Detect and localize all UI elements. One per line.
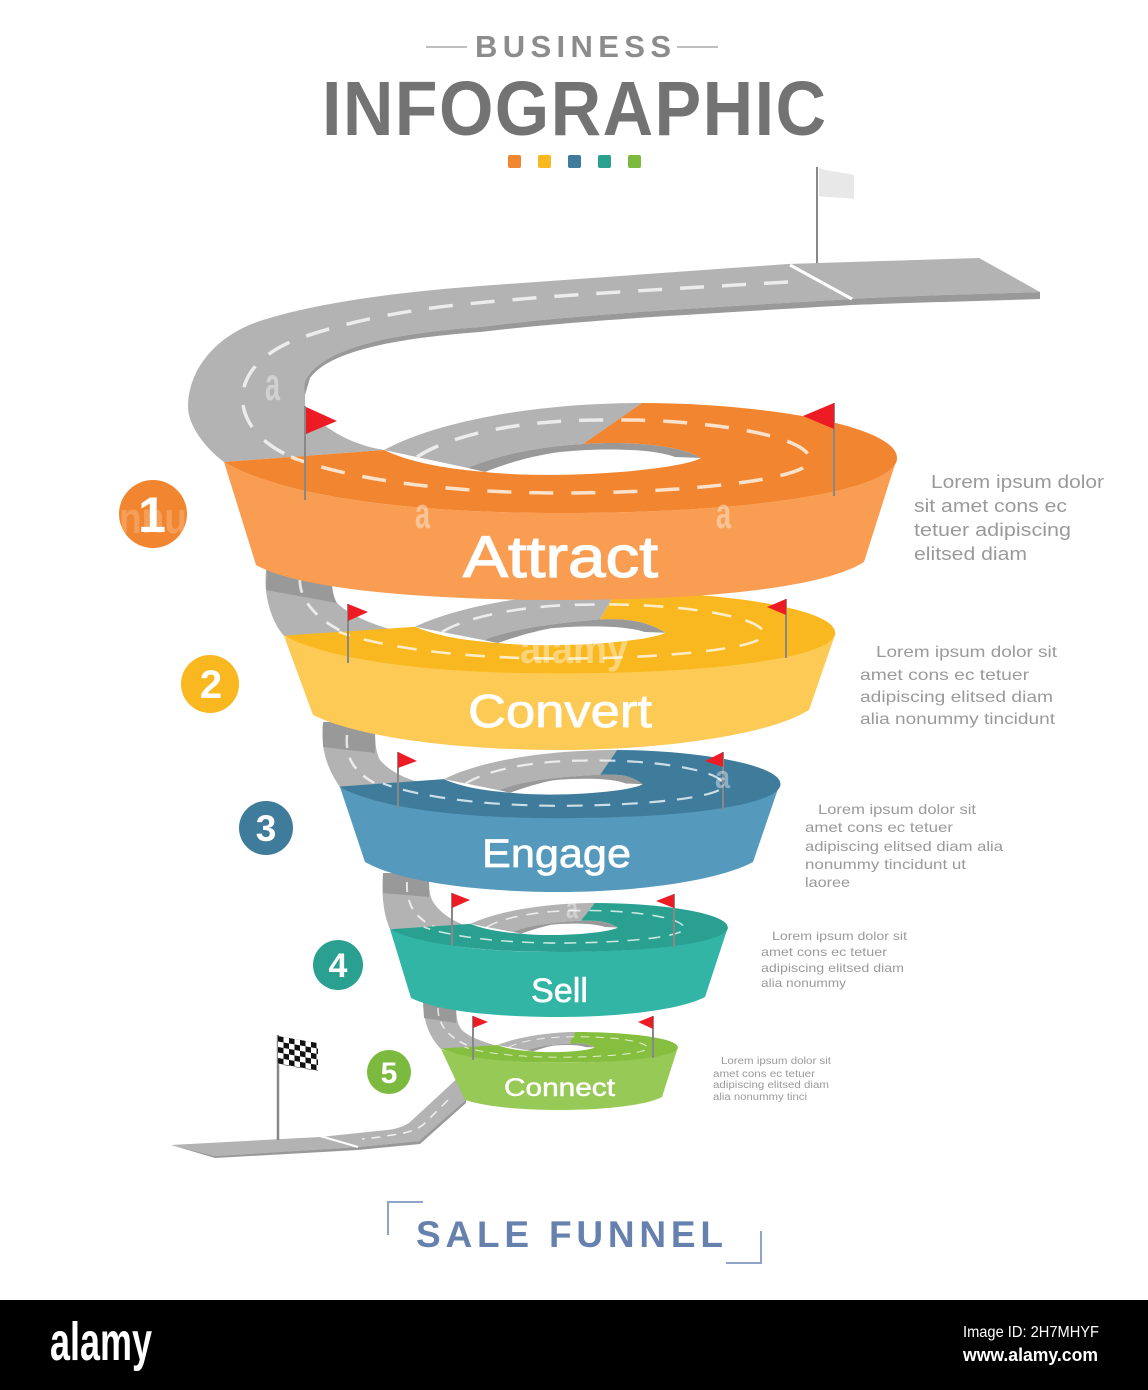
watermarks on orange: a bbox=[415, 489, 430, 538]
description 4: amet cons ec tetuer bbox=[761, 945, 887, 959]
top road bbox=[188, 258, 1040, 462]
funnel band 2 bbox=[284, 632, 836, 750]
description 5: amet cons ec tetuer bbox=[713, 1069, 816, 1080]
watermark on blue road: a bbox=[715, 759, 730, 795]
label: attract: Attract bbox=[463, 525, 658, 590]
flags 1 bbox=[305, 403, 834, 500]
start flag: white bbox=[817, 167, 854, 264]
description 5 bbox=[713, 1056, 831, 1103]
flags 5 bbox=[473, 1016, 653, 1060]
label: engage: Engage bbox=[482, 832, 631, 876]
footer heading: sale funnel: SALE FUNNEL bbox=[416, 1214, 723, 1255]
description 4: adipiscing elitsed diam bbox=[761, 961, 904, 975]
description 2: amet cons ec tetuer bbox=[860, 667, 1030, 684]
colour swatches bbox=[508, 155, 641, 168]
watermark footer bar: alamy bbox=[50, 1312, 152, 1372]
funnel band 4 bbox=[390, 927, 728, 1017]
description 3 bbox=[805, 801, 1003, 890]
funnel top and road 1 bbox=[224, 403, 897, 513]
watermark footer bar: www.alamy.com bbox=[962, 1345, 1098, 1365]
number badge 1: nnu bbox=[119, 494, 187, 543]
description 4 bbox=[761, 929, 908, 990]
number badge 4 bbox=[313, 940, 363, 990]
description 2: alia nonummy tincidunt bbox=[860, 711, 1056, 728]
watermark footer bar: Image ID: 2H7MHYF bbox=[963, 1324, 1099, 1341]
description 2: adipiscing elitsed diam bbox=[860, 689, 1053, 706]
description 4: Lorem ipsum dolor sit bbox=[772, 929, 908, 943]
funnel top and road 4 bbox=[390, 903, 728, 952]
title: infographic: INFOGRAPHIC bbox=[322, 65, 826, 152]
level 5: connect bbox=[423, 1000, 678, 1110]
connector road 2 bbox=[266, 565, 410, 642]
label: connect: Connect bbox=[504, 1074, 615, 1102]
number badge 1: 1 bbox=[138, 487, 166, 543]
number badge 3: 3 bbox=[256, 808, 276, 849]
number badge 3 bbox=[239, 801, 293, 855]
description 5: adipiscing elitsed diam bbox=[713, 1080, 829, 1091]
flags 3 bbox=[398, 752, 723, 810]
description 3: nonummy tincidunt ut bbox=[805, 856, 966, 872]
funnel top and road 2 bbox=[284, 592, 835, 673]
level 2: convert bbox=[266, 565, 836, 750]
flags 4 bbox=[452, 893, 674, 947]
watermark on teal road: a bbox=[566, 892, 578, 925]
number badge 5: 5 bbox=[381, 1057, 397, 1090]
description 5: Lorem ipsum dolor sit bbox=[721, 1056, 831, 1067]
label: convert: Convert bbox=[468, 685, 652, 737]
level 4: sell bbox=[382, 873, 728, 1017]
level 1: attract bbox=[188, 258, 1040, 600]
funnel band 1 bbox=[224, 458, 897, 600]
watermarks on orange bbox=[415, 489, 731, 538]
description 3: adipiscing elitsed diam alia bbox=[805, 838, 1003, 854]
level 3: engage bbox=[322, 722, 780, 892]
funnel band 5 bbox=[441, 1047, 678, 1110]
connector road 3 bbox=[322, 722, 447, 792]
road exit and checkered finish bbox=[171, 1035, 490, 1158]
description 1: Lorem ipsum dolor bbox=[931, 472, 1104, 492]
description 1: sit amet cons ec bbox=[914, 496, 1067, 516]
number badge 4: 4 bbox=[329, 947, 348, 985]
description 5: alia nonummy tinci bbox=[713, 1092, 807, 1103]
watermark footer bar bbox=[0, 1300, 1148, 1390]
watermark on yellow: alamy bbox=[520, 625, 629, 672]
description 3: laoree bbox=[805, 874, 850, 890]
description 3: Lorem ipsum dolor sit bbox=[818, 801, 976, 817]
heading: business: BUSINESS bbox=[475, 29, 671, 64]
funnel top and road 5 bbox=[441, 1032, 678, 1063]
funnel top and road 3 bbox=[339, 750, 780, 818]
description 1 bbox=[914, 472, 1104, 564]
number badge 1 bbox=[119, 480, 187, 548]
footer heading: sale funnel bbox=[388, 1202, 761, 1263]
description 2: Lorem ipsum dolor sit bbox=[876, 644, 1058, 661]
description 2 bbox=[860, 644, 1058, 728]
top road: a bbox=[265, 358, 280, 410]
description 4: alia nonummy bbox=[761, 976, 846, 990]
number badge 2: 2 bbox=[200, 663, 222, 707]
funnel band 3 bbox=[340, 783, 780, 892]
label: sell: Sell bbox=[531, 972, 588, 1010]
description 1: elitsed diam bbox=[914, 544, 1027, 564]
description 3: amet cons ec tetuer bbox=[805, 819, 953, 835]
description 1: tetuer adipiscing bbox=[914, 520, 1071, 540]
number badge 2 bbox=[181, 655, 239, 713]
connector road 5 bbox=[423, 1000, 500, 1050]
connector road 4 bbox=[382, 873, 476, 933]
watermarks on orange: a bbox=[716, 489, 731, 538]
number badge 5 bbox=[367, 1050, 411, 1094]
flags 2 bbox=[348, 599, 786, 663]
